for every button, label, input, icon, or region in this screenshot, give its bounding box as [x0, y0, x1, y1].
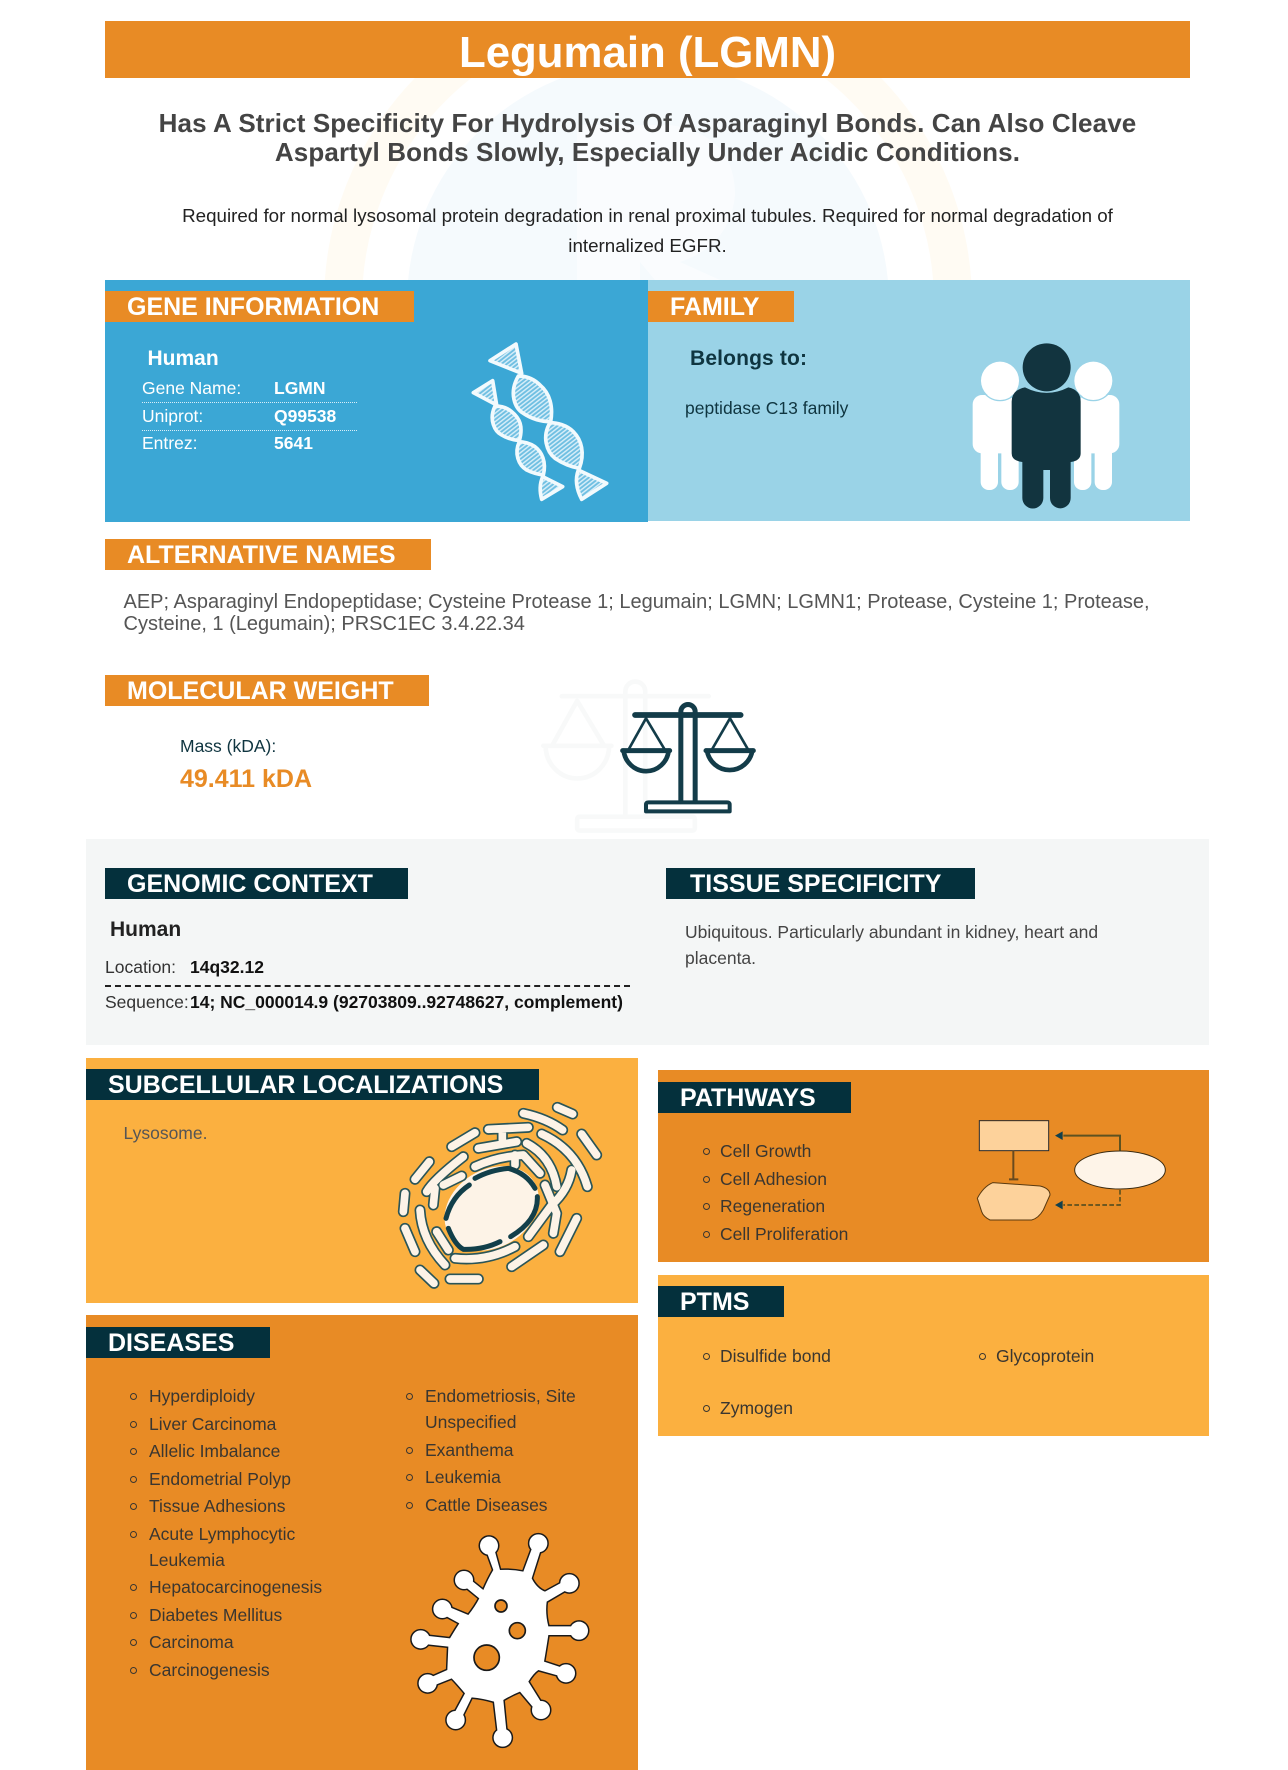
list: diseases column 1: Allelic Imbalance	[149, 1441, 280, 1461]
list: ptms: Disulfide bond	[720, 1346, 831, 1366]
title banner	[105, 21, 1190, 78]
list: pathways: Cell Proliferation	[720, 1224, 848, 1244]
list: ptms: Zymogen	[720, 1398, 793, 1418]
icon: pathway diagram	[976, 1120, 1166, 1220]
location row: Location:	[105, 957, 176, 977]
gene details table: LGMN	[274, 378, 326, 398]
list: diseases column 1: Diabetes Mellitus	[149, 1605, 282, 1625]
list: ptms	[703, 1346, 1094, 1418]
list: diseases column 2: Leukemia	[425, 1467, 501, 1487]
sequence row: Sequence:	[105, 992, 189, 1012]
heading: gene information: GENE INFORMATION	[127, 293, 379, 321]
list: diseases column 2: Cattle Diseases	[425, 1495, 548, 1515]
list: diseases column 1: Carcinoma	[149, 1632, 234, 1652]
panel: ptms	[658, 1275, 1209, 1436]
mass value: 49.411 kDA	[180, 764, 312, 792]
panel: pathways	[658, 1070, 1209, 1262]
heading: diseases: DISEASES	[108, 1329, 234, 1357]
list: diseases column 1	[130, 1386, 322, 1680]
gene details table: Uniprot:	[142, 406, 203, 426]
list: ptms: Glycoprotein	[996, 1346, 1094, 1366]
alternative names text	[124, 591, 1150, 635]
list: diseases column 1: Endometrial Polyp	[149, 1469, 291, 1489]
sequence value: 14; NC_000014.9 (92703809..92748627, complement)	[190, 992, 623, 1012]
species label: human: Human	[110, 918, 181, 941]
alternative names text: Cysteine, 1 (Legumain); PRSC1EC 3.4.22.34	[124, 613, 525, 635]
gene details table: Gene Name:	[142, 378, 241, 398]
heading: tissue specificity: TISSUE SPECIFICITY	[690, 870, 941, 898]
heading: ptms	[658, 1286, 784, 1317]
heading: ptms: PTMS	[680, 1288, 749, 1316]
icon: dna strands	[471, 342, 609, 502]
panel: genomic context and tissue specificity	[86, 839, 1209, 1045]
heading: family	[648, 291, 794, 322]
gene details table: Q99538	[274, 406, 336, 426]
list: diseases column 2: Exanthema	[425, 1440, 514, 1460]
list: diseases column 1: Leukemia	[149, 1550, 225, 1570]
list: diseases column 2: Unspecified	[425, 1412, 516, 1432]
heading: pathways: PATHWAYS	[680, 1084, 816, 1112]
description: Required for normal lysosomal protein degradation in renal proximal tubules. Required for normal degradation of	[182, 205, 1113, 226]
subtitle: Aspartyl Bonds Slowly, Especially Under Acidic Conditions.	[275, 137, 1020, 167]
list: diseases column 1: Hyperdiploidy	[149, 1386, 255, 1406]
panel: family	[648, 280, 1190, 521]
gene details table: Entrez:	[142, 433, 197, 453]
list: diseases column 2: Endometriosis, Site	[425, 1386, 576, 1406]
list: pathways: Cell Adhesion	[720, 1169, 827, 1189]
list: diseases column 1: Carcinogenesis	[149, 1660, 270, 1680]
subtitle	[159, 108, 1136, 167]
list: diseases column 1: Tissue Adhesions	[149, 1496, 286, 1516]
panel: diseases	[86, 1315, 638, 1770]
heading: genomic context: GENOMIC CONTEXT	[127, 870, 373, 898]
description	[182, 205, 1113, 256]
heading: family: FAMILY	[670, 293, 759, 321]
tissue specificity text: placenta.	[685, 948, 756, 968]
gene details table: 5641	[274, 433, 313, 453]
heading: pathways	[658, 1082, 851, 1113]
heading: diseases	[86, 1327, 270, 1358]
localization text: Lysosome.	[124, 1123, 207, 1143]
background watermark logo	[325, 78, 971, 280]
family name: peptidase C13 family	[685, 398, 848, 418]
belongs to label: Belongs to:	[690, 347, 807, 370]
list: pathways: Regeneration	[720, 1196, 825, 1216]
list: diseases column 1: Liver Carcinoma	[149, 1414, 276, 1434]
location value: 14q32.12	[190, 957, 264, 977]
alternative names text: AEP; Asparaginyl Endopeptidase; Cysteine Protease 1; Legumain; LGMN; LGMN1; Protease, Cysteine 1; Protease,	[124, 591, 1150, 613]
list: diseases column 2	[406, 1386, 576, 1515]
icon: virus	[410, 1532, 590, 1748]
heading: alternative names: ALTERNATIVE NAMES	[127, 541, 396, 569]
tissue specificity text	[685, 922, 1098, 968]
gene details table	[142, 378, 357, 453]
heading: molecular weight: MOLECULAR WEIGHT	[127, 677, 394, 705]
icon: faint balance scale	[520, 670, 780, 840]
icon: lysosome organelle	[398, 1102, 602, 1289]
species label: human: Human	[148, 347, 219, 370]
subtitle: Has A Strict Specificity For Hydrolysis Of Asparaginyl Bonds. Can Also Cleave	[159, 108, 1136, 138]
list: pathways	[703, 1141, 848, 1244]
description: internalized EGFR.	[568, 234, 727, 256]
heading: subcellular localizations: SUBCELLULAR LOCALIZATIONS	[108, 1071, 503, 1099]
title banner: Legumain (LGMN)	[459, 28, 836, 77]
panel: subcellular localizations	[86, 1058, 638, 1303]
list: pathways: Cell Growth	[720, 1141, 811, 1161]
tissue specificity text: Ubiquitous. Particularly abundant in kidney, heart and	[685, 922, 1098, 942]
icon: group of people	[972, 343, 1120, 508]
icon: balance scale	[620, 702, 756, 814]
mass label: Mass (kDA):	[180, 736, 276, 756]
list: diseases column 1: Hepatocarcinogenesis	[149, 1577, 322, 1597]
list: diseases column 1: Acute Lymphocytic	[149, 1524, 295, 1544]
panel: gene information	[105, 280, 648, 522]
